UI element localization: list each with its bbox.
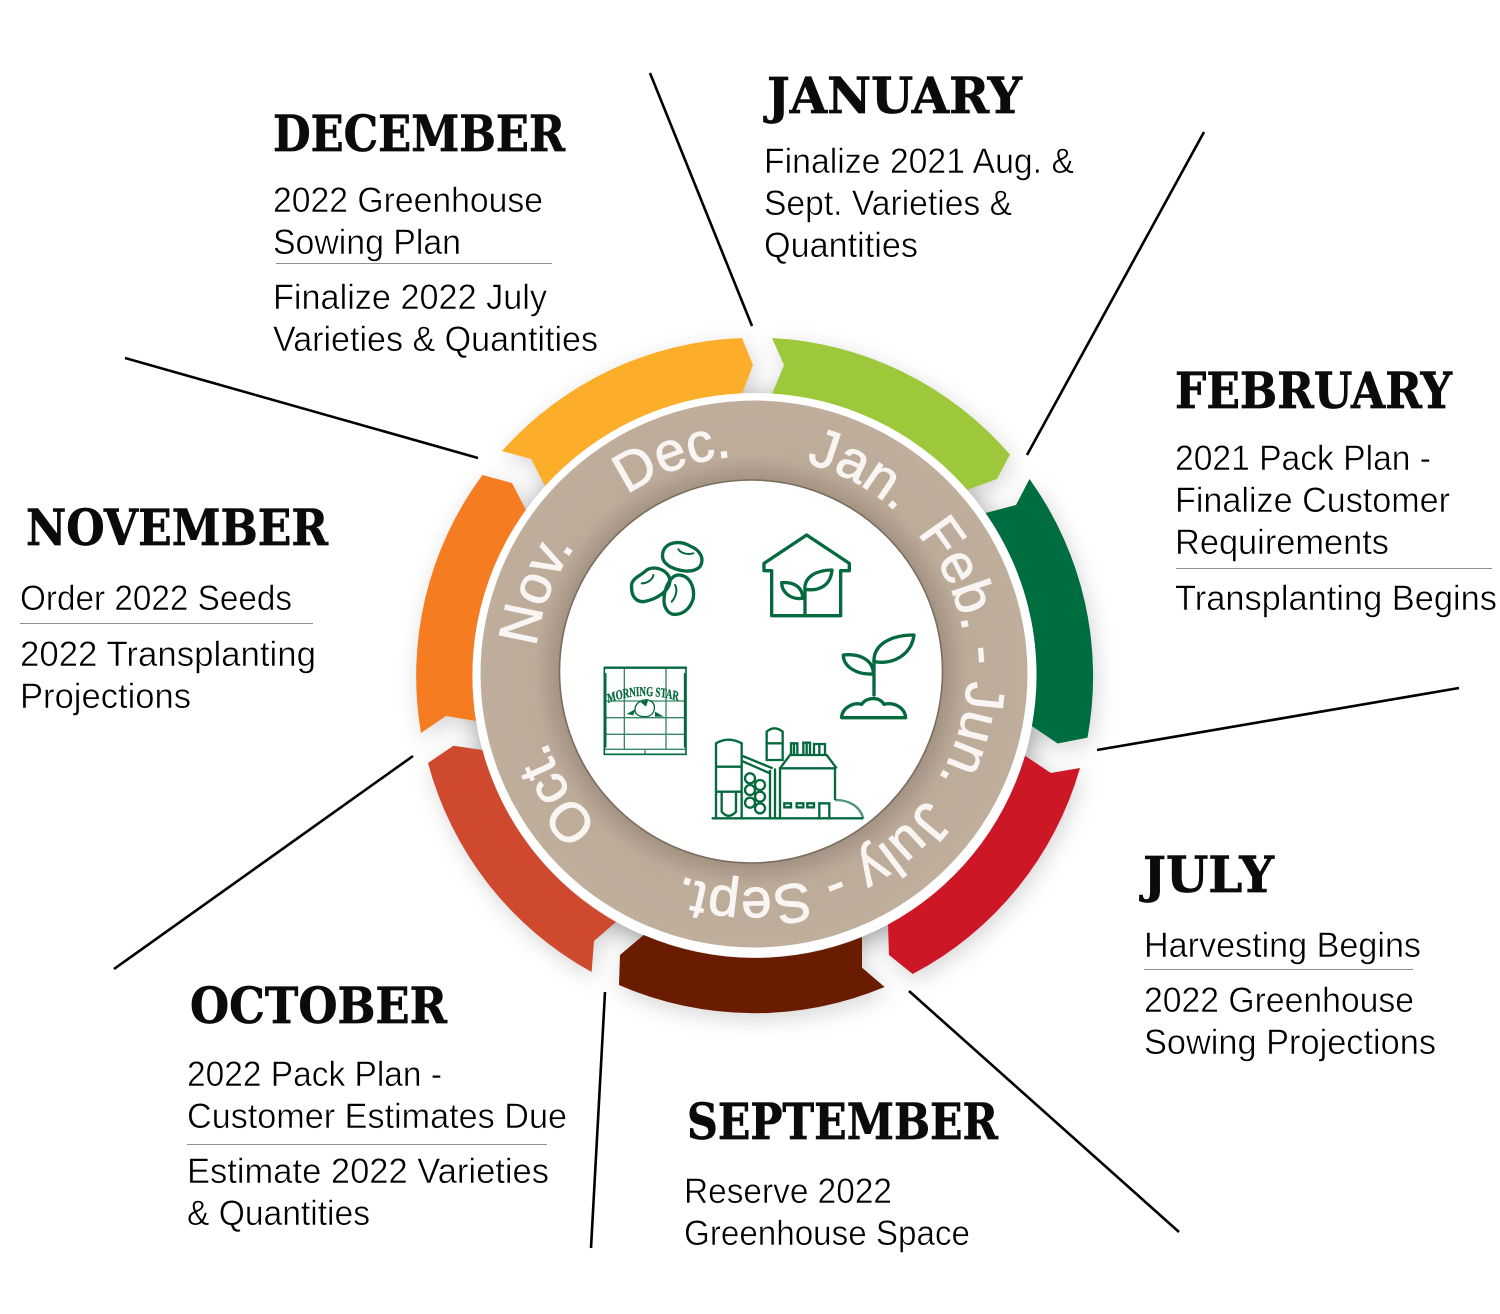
text block: October: Estimate 2022 Varieties [187, 1152, 549, 1191]
beige month ring [480, 400, 1028, 948]
text block: November: 2022 Transplanting [20, 635, 316, 674]
text block: October: & Quantities [187, 1194, 370, 1233]
segment: January [772, 338, 1010, 490]
text block: December: Varieties & Quantities [273, 320, 598, 359]
segment: December [502, 338, 753, 486]
heading: December: DECEMBER [273, 104, 565, 163]
ring label: Oct.: Oct. [521, 745, 590, 842]
text block: October: 2022 Pack Plan - [187, 1055, 442, 1094]
text block: January [763, 66, 1074, 265]
ring label: Nov.: Nov. [498, 542, 573, 644]
text block: July: Sowing Projections [1144, 1023, 1436, 1062]
centre circle [560, 480, 942, 863]
text block: February: 2021 Pack Plan - [1175, 439, 1431, 478]
segment: February to June [986, 479, 1093, 744]
circular calendar wheel [416, 338, 1093, 1013]
heading: September: SEPTEMBER [687, 1092, 998, 1151]
segment: November [416, 475, 526, 733]
text block: October [187, 976, 567, 1233]
heading: July: JULY [1139, 845, 1275, 904]
text block: July: Harvesting Begins [1144, 926, 1421, 965]
text block: December: 2022 Greenhouse [273, 181, 543, 220]
text block: July: 2022 Greenhouse [1144, 981, 1414, 1020]
heading: November: NOVEMBER [26, 498, 328, 557]
text block: January: Quantities [764, 226, 918, 265]
text block: December: Sowing Plan [273, 223, 461, 262]
text block: November: Projections [20, 677, 191, 716]
text block: February [1175, 361, 1497, 618]
text block: October: Customer Estimates Due [187, 1097, 567, 1136]
icon: sprout in soil [842, 635, 914, 718]
text block: July [1139, 845, 1436, 1062]
text block: February: Transplanting Begins [1175, 579, 1497, 618]
text block: January: Sept. Varieties & [764, 184, 1012, 223]
text block: February: Requirements [1175, 523, 1389, 562]
icon: beans [631, 543, 702, 614]
icon: Morning Star tote bin [604, 668, 686, 754]
icon: greenhouse with seedling [764, 535, 849, 616]
ring label: Jan.: Jan. [809, 430, 898, 510]
heading: February: FEBRUARY [1175, 361, 1453, 420]
text block: December: Finalize 2022 July [273, 278, 547, 317]
text block: September [684, 1092, 998, 1253]
outer month arrow segments [416, 338, 1093, 1013]
ring label: July - Sept.: July - Sept. [683, 804, 949, 924]
ring label: Feb. - Jun.: Feb. - Jun. [919, 514, 1004, 779]
icon: processing factory [712, 728, 863, 818]
text block: January: Finalize 2021 Aug. & [764, 142, 1074, 181]
text block: November: Order 2022 Seeds [20, 579, 292, 618]
ring label: Dec.: Dec. [611, 431, 728, 493]
heading: January: JANUARY [763, 66, 1023, 125]
white separator ring [472, 393, 1036, 957]
segment: July [888, 756, 1080, 974]
segment: October [428, 746, 616, 972]
text block: December [273, 104, 598, 359]
text block: February: Finalize Customer [1175, 481, 1450, 520]
bin label text: MORNING STAR [606, 686, 679, 704]
text block: September: Reserve 2022 [684, 1172, 892, 1211]
text block: November [20, 498, 328, 716]
heading: October: OCTOBER [190, 976, 447, 1035]
text block: September: Greenhouse Space [684, 1214, 970, 1253]
segment: August and September [619, 935, 885, 1013]
